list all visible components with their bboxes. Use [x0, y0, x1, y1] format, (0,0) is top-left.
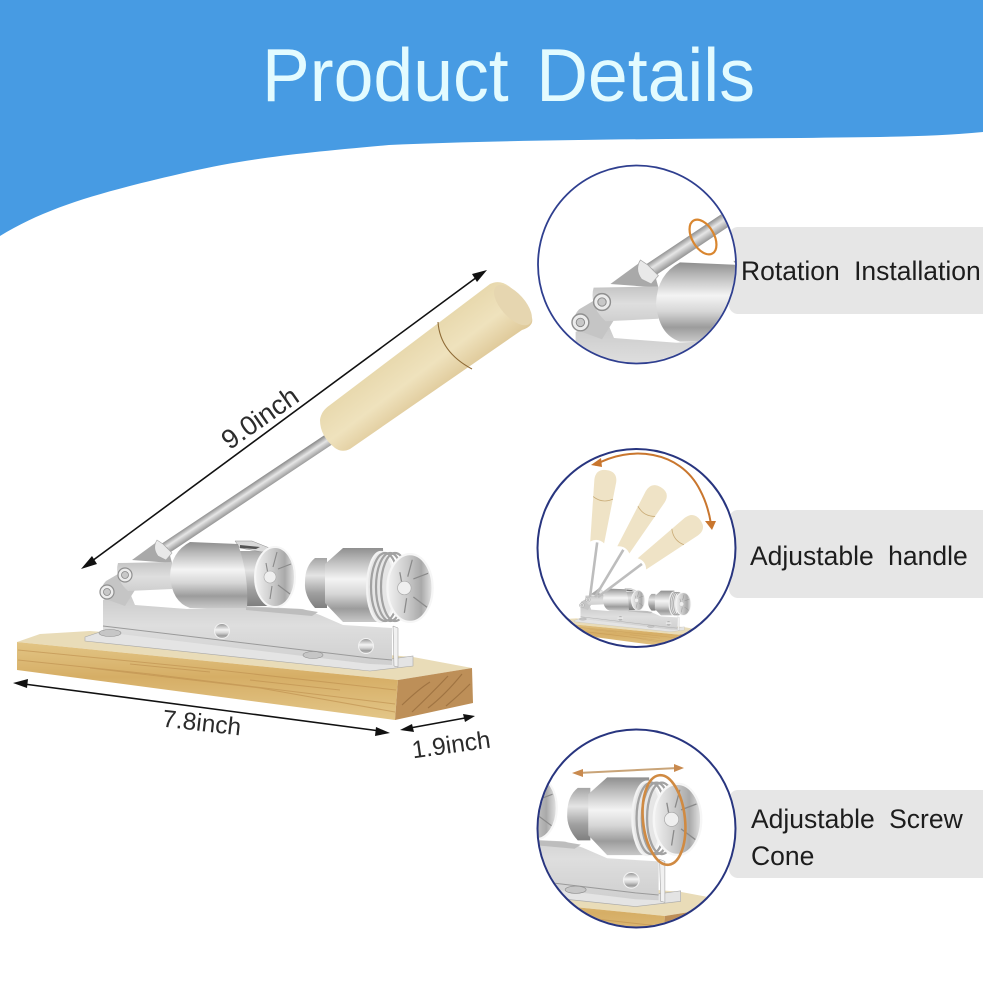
label panel: rotation installation: Rotation Installation: [741, 256, 981, 286]
main product illustration: nut cracker: [17, 278, 539, 720]
dimension: handle length: 9.0inch: [216, 381, 304, 455]
dimension: base width: [400, 714, 492, 764]
three handle positions: [588, 470, 703, 598]
dimension: base width: 1.9inch: [410, 727, 492, 764]
arrow: handle swing arc: [591, 454, 716, 530]
detail circle: adjustable screw cone: [536, 728, 736, 928]
header band: [0, 0, 983, 236]
dimension: base length: [13, 679, 390, 741]
icon: orange rotation ring: [684, 215, 722, 259]
detail circle: adjustable handle: [538, 449, 736, 648]
detail circle: rotation installation: [537, 164, 737, 364]
dimension: base length: 7.8inch: [161, 706, 243, 741]
label panel: adjustable screw cone: Cone: [751, 841, 814, 871]
metal handle and wooden grip: [163, 278, 539, 550]
arrow: horizontal adjustment: [572, 764, 684, 777]
icon: orange screw ring: [638, 773, 690, 867]
miniature cracker: [569, 588, 692, 645]
dimension: handle length: [81, 270, 487, 569]
label panel: adjustable handle: [729, 510, 983, 598]
label panel: adjustable screw cone: [729, 790, 983, 878]
label panel: rotation installation: [729, 227, 983, 314]
title: Product Details: [262, 33, 755, 117]
magnified screw cone: [538, 777, 706, 926]
metal cracking mechanism: [85, 540, 433, 671]
wooden base: [17, 631, 473, 720]
label panel: adjustable handle: Adjustable handle: [750, 541, 968, 571]
label panel: adjustable screw cone: Adjustable Screw: [751, 804, 964, 834]
magnified pivot and handle rod: [571, 214, 735, 362]
